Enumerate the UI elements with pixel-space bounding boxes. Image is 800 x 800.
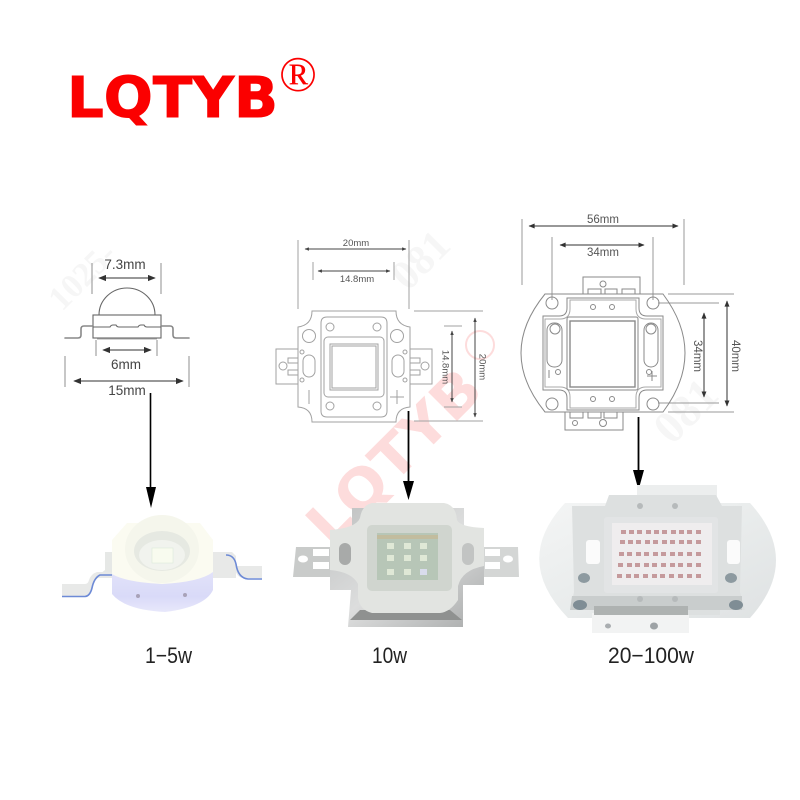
lower body	[112, 560, 213, 612]
arrow: 1-5w drawing to photo	[146, 393, 156, 508]
LED grid	[617, 530, 701, 578]
registered mark: ®	[279, 46, 317, 102]
label: 10w: 10w	[372, 643, 407, 668]
logo wordmark: LQTYB	[67, 66, 278, 131]
dimension labels	[104, 257, 146, 398]
base disc	[539, 503, 776, 618]
watermark: faint serial numbers: 081	[643, 368, 728, 453]
metal base	[330, 508, 484, 627]
dome	[125, 515, 199, 583]
dimension labels: 14.8mm	[340, 274, 374, 285]
diagram: 10w dimensions	[276, 238, 488, 422]
raised plate	[570, 495, 745, 615]
centre panel	[604, 517, 718, 593]
dimension labels: 40mm	[729, 340, 741, 372]
photo: 1-5w LED	[62, 515, 262, 612]
chip	[152, 548, 173, 563]
dimension labels: 14.8mm	[440, 350, 450, 384]
dimension labels: 6mm	[111, 357, 141, 372]
watermark: faint serial numbers: 081	[383, 222, 460, 299]
watermark: faint serial numbers	[41, 222, 728, 453]
dimension labels: 20mm	[343, 238, 369, 249]
slots	[586, 540, 600, 564]
dimension labels: 20mm	[476, 354, 488, 380]
LED chips	[387, 543, 427, 575]
top surface	[330, 503, 484, 613]
label: 20-100w: 20−100w	[608, 643, 694, 668]
watermark: pink diagonal brand: LQTYB	[294, 356, 495, 558]
top body	[112, 523, 213, 584]
arrow: 20-100w drawing to photo	[633, 417, 644, 490]
watermark: faint serial numbers: 1025-	[41, 235, 124, 318]
silver lead tabs	[95, 552, 115, 578]
dimension arrows	[74, 278, 183, 381]
label: 1-5w: 1−5w	[145, 643, 192, 668]
arrow: 10w drawing to photo	[403, 411, 414, 500]
base shadow	[350, 610, 462, 620]
photo: 10w LED	[293, 503, 519, 627]
dimension arrows	[305, 249, 475, 417]
diagram: 1-5w dimensions	[65, 257, 189, 398]
side slots	[339, 543, 351, 565]
centre panel	[367, 525, 452, 591]
diagram: 20-100w dimensions	[521, 214, 741, 430]
dimension labels: 15mm	[108, 383, 146, 398]
photo: 20-100w LED	[539, 485, 776, 633]
dimension labels: 34mm	[587, 247, 619, 259]
dimension labels	[587, 214, 741, 372]
dimension labels: 7.3mm	[104, 257, 146, 272]
dimension labels: 56mm	[587, 214, 619, 226]
tabs	[637, 485, 717, 499]
dimension labels	[340, 238, 488, 384]
logo	[67, 46, 317, 131]
dimension arrows	[529, 226, 727, 406]
blue lead edges	[62, 575, 112, 596]
tabs	[293, 547, 332, 577]
dimension labels: 34mm	[691, 340, 703, 372]
